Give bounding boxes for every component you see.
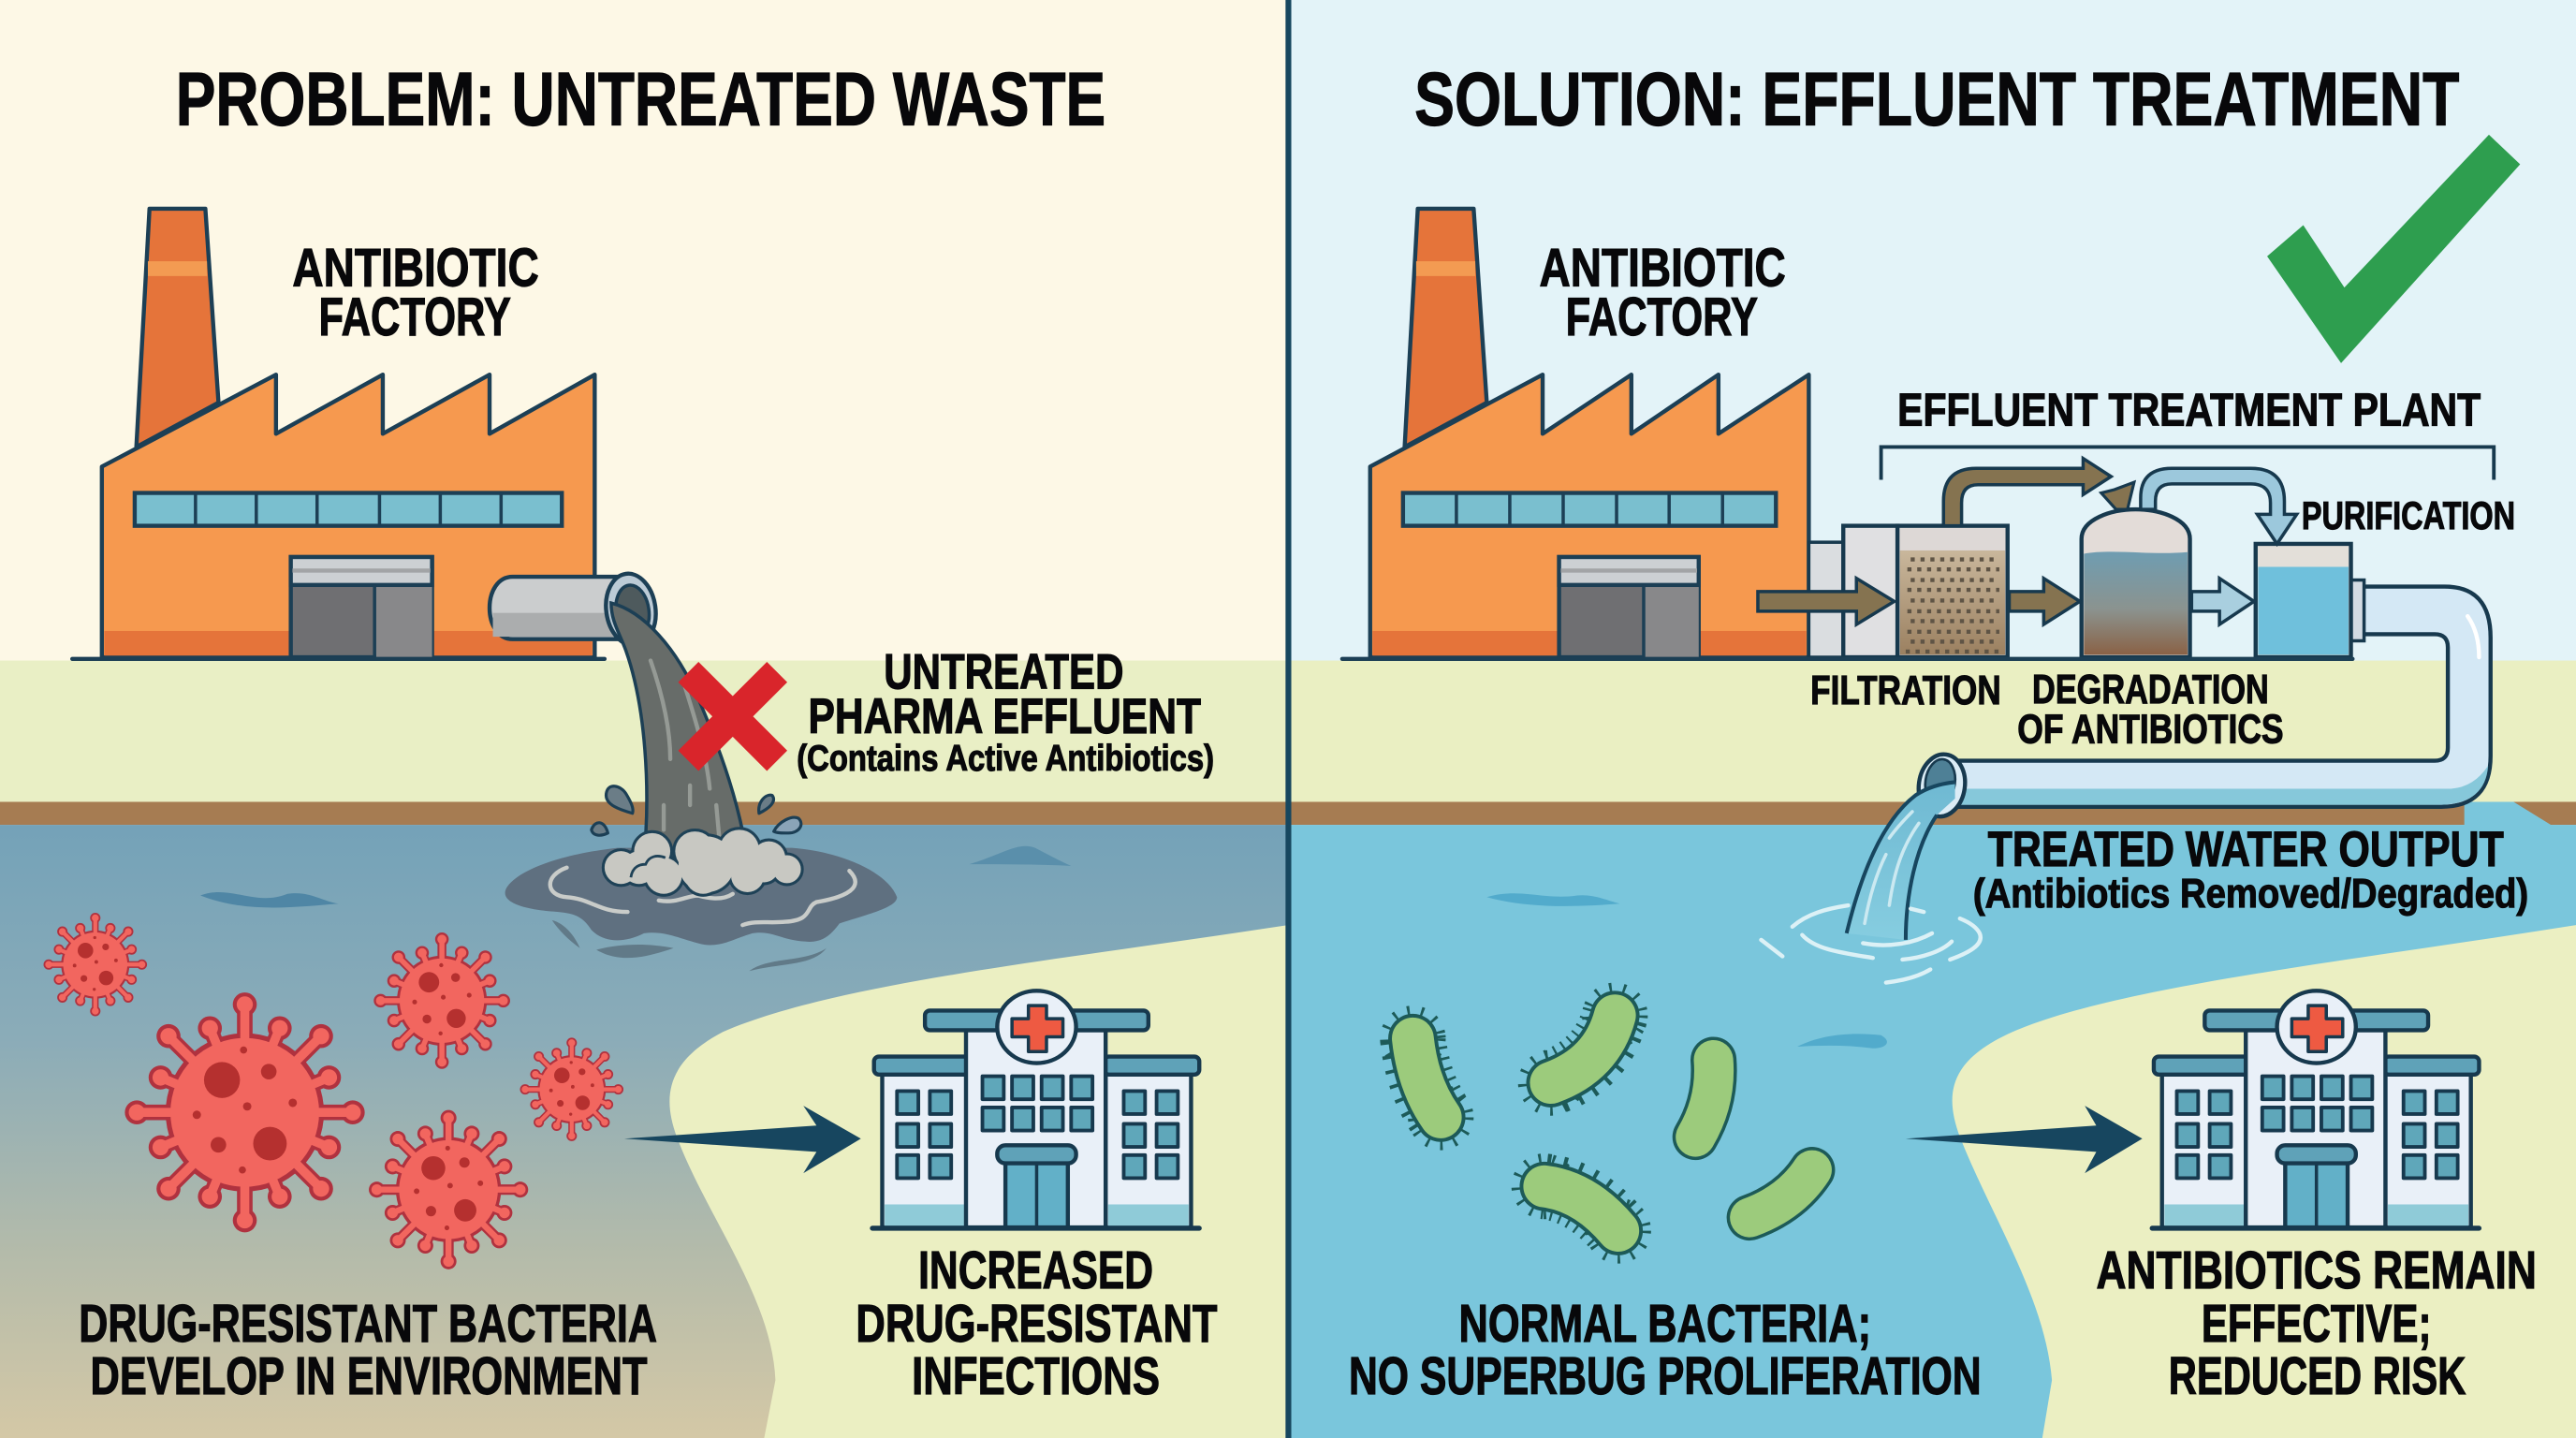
arrow: curved brown bypass <box>1943 459 2111 526</box>
label: antibiotic factory, solution side <box>1540 238 1786 347</box>
icon: red x mark <box>688 672 777 761</box>
icon: discharge pipe <box>490 570 660 649</box>
arrow: filtration to tank <box>2009 579 2080 624</box>
label: drug-resistant bacteria: DRUG-RESISTANT BACTERIA <box>79 1294 657 1353</box>
filtration unit <box>1808 526 2008 657</box>
foam at outfall <box>605 829 801 894</box>
icon: antibiotic factory, solution side <box>1370 209 1808 657</box>
icon: antibiotic factory, problem side <box>72 209 605 659</box>
icon: hospital, problem side <box>872 990 1199 1228</box>
label: normal bacteria: NO SUPERBUG PROLIFERATION <box>1349 1346 1982 1405</box>
panel: problem background <box>0 0 1288 1438</box>
label: degradation of antibiotics: OF ANTIBIOTICS <box>2017 706 2284 752</box>
label: normal bacteria: NORMAL BACTERIA; <box>1459 1294 1871 1353</box>
label: increased infections <box>856 1240 1218 1405</box>
arrow: normal bacteria to hospital <box>1906 1106 2143 1173</box>
icon: hospital, solution side <box>2152 990 2479 1228</box>
arrow: curved blue to purification <box>2141 468 2297 544</box>
label: effluent treatment plant: EFFLUENT TREATMENT PLANT <box>1897 386 2481 436</box>
label: treated water output <box>1973 822 2528 917</box>
label: normal bacteria <box>1349 1294 1982 1405</box>
label: antibiotic factory, problem side: ANTIBIOTIC <box>292 238 539 298</box>
degradation tank <box>2082 509 2190 657</box>
label: antibiotic factory, problem side <box>292 238 539 347</box>
label: drug-resistant bacteria <box>79 1294 657 1405</box>
label: untreated pharma effluent: PHARMA EFFLUENT <box>809 689 1201 744</box>
label: antibiotics remain effective <box>2097 1240 2537 1405</box>
label: untreated pharma effluent: (Contains Active Antibiotics) <box>797 739 1214 779</box>
label: antibiotic factory, problem side: FACTORY <box>318 287 511 347</box>
arrow: factory to filtration <box>1758 579 1895 624</box>
water ripples <box>1761 905 1981 983</box>
label: untreated pharma effluent: UNTREATED <box>884 644 1123 699</box>
treated water stream <box>1847 751 1969 940</box>
label: drug-resistant bacteria: DEVELOP IN ENVIRONMENT <box>91 1346 648 1405</box>
treated water output pipe <box>1955 580 2491 807</box>
arrow: brown down to tank <box>2101 482 2134 509</box>
purification tank <box>2256 544 2351 657</box>
label: degradation of antibiotics: DEGRADATION <box>2032 667 2269 712</box>
title: problem: PROBLEM: UNTREATED WASTE <box>176 57 1105 141</box>
label: degradation of antibiotics <box>2017 667 2284 752</box>
label: antibiotic factory, solution side: FACTORY <box>1566 287 1758 347</box>
icon: green check mark <box>2267 135 2520 363</box>
arrow: tank to purification <box>2191 579 2254 624</box>
label: purification: PURIFICATION <box>2302 493 2515 537</box>
arrow: bacteria to infections <box>624 1106 861 1173</box>
effluent stream <box>611 603 748 858</box>
label: increased infections: INCREASED <box>918 1240 1153 1299</box>
label: antibiotics remain effective: EFFECTIVE; <box>2202 1294 2432 1353</box>
label: antibiotic factory, solution side: ANTIBIOTIC <box>1540 238 1786 298</box>
bracket: treatment plant <box>1881 447 2494 479</box>
label: filtration: FILTRATION <box>1810 668 2001 713</box>
label: untreated pharma effluent <box>797 644 1214 779</box>
panel divider <box>1285 0 1292 1438</box>
icon: normal bacteria group <box>1395 997 1812 1249</box>
label: antibiotics remain effective: REDUCED RISK <box>2169 1346 2466 1405</box>
label: increased infections: DRUG-RESISTANT <box>856 1294 1218 1353</box>
label: increased infections: INFECTIONS <box>912 1346 1160 1405</box>
icon: drug-resistant bacteria group <box>49 917 619 1261</box>
panel: solution background <box>1288 0 2576 1438</box>
plant base line <box>1342 658 2352 660</box>
effluent slick on water <box>505 848 897 971</box>
effluent splash drops <box>592 786 801 835</box>
